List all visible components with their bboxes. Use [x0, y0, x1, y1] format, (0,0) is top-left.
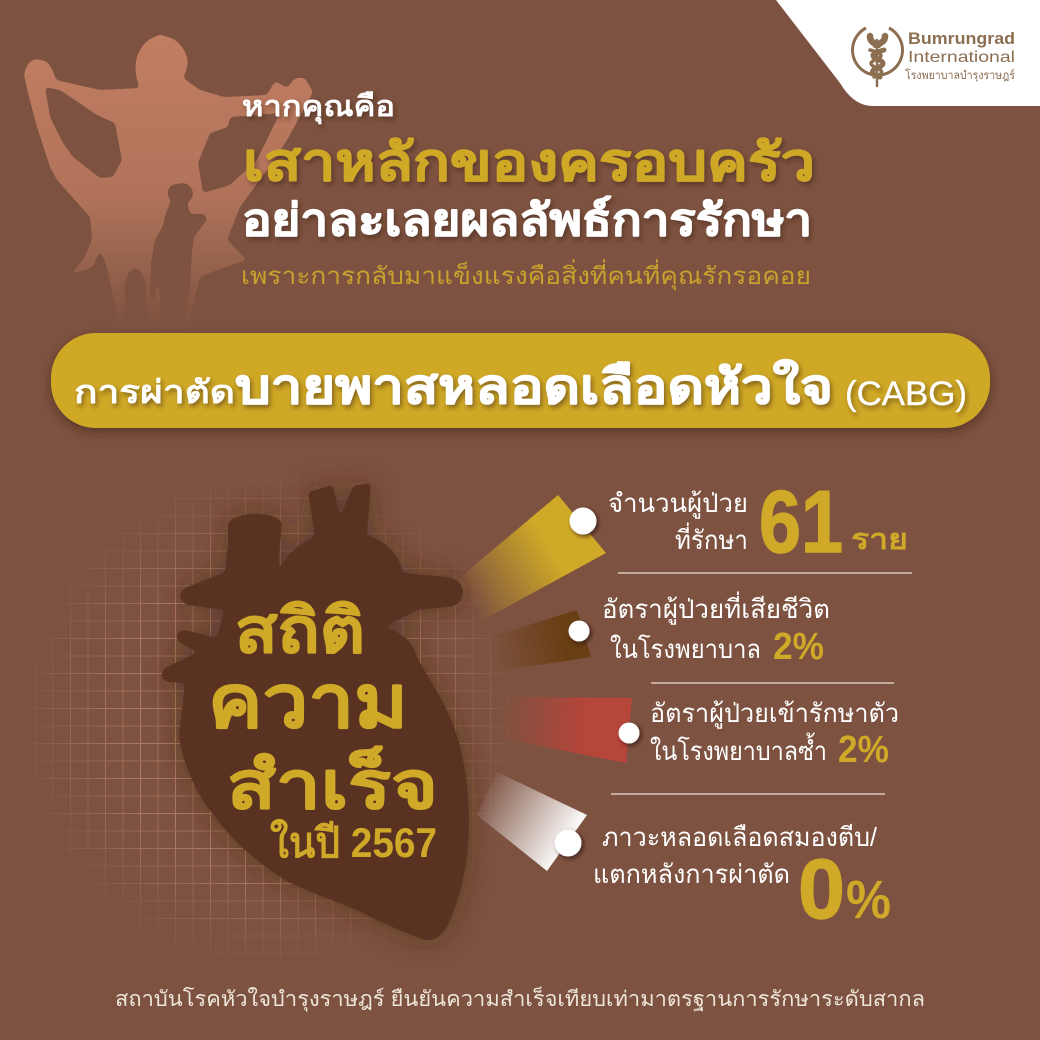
subheading: เพราะการกลับมาแข็งแรงคือสิ่งที่คนที่คุณรักรอคอย [241, 259, 811, 291]
stat: stroke: แตกหลังการผ่าตัด [593, 859, 790, 889]
logo text: International [908, 49, 1015, 66]
stat: readmission: ในโรงพยาบาลซ้ำ [650, 732, 827, 766]
main heading gold: เสาหลักของครอบครัว [243, 134, 815, 192]
ray: brown [480, 610, 591, 674]
dot: gold ray [570, 508, 596, 534]
logo panel [776, 0, 1040, 106]
logo text: โรงพยาบาลบำรุงราษฎร์ [905, 68, 1015, 82]
eyebrow: หากคุณคือ [242, 91, 395, 124]
dot: red ray [618, 722, 640, 744]
stat: readmission: อัตราผู้ป่วยเข้ารักษาตัว [650, 698, 899, 729]
stat: stroke: 0 [798, 842, 845, 936]
stat: stroke: ภาวะหลอดเลือดสมองตีบ/ [602, 822, 878, 852]
dot: white ray [554, 830, 582, 856]
heart title: สถิติ [235, 597, 365, 666]
stat: patients treated: ที่รักษา [675, 522, 748, 555]
stat: patients treated: ราย [851, 524, 908, 556]
stat: readmission: 2% [838, 729, 889, 771]
stat: patients treated [608, 472, 908, 571]
logo text: Bumrungrad [908, 29, 1015, 48]
heart title [208, 597, 438, 866]
footer note: สถาบันโรคหัวใจบำรุงราษฎร์ ยืนยันความสำเร็จเทียบเท่ามาตรฐานการรักษาระดับสากล [115, 985, 925, 1012]
stat: in-hospital mortality: อัตราผู้ป่วยที่เสียชีวิต [602, 591, 830, 625]
dot: brown ray [568, 620, 590, 642]
ray: white [477, 772, 587, 871]
stat: patients treated: 61 [759, 472, 843, 571]
heart title: สำเร็จ [227, 745, 438, 822]
logo text [905, 29, 1015, 82]
stat: stroke [593, 822, 891, 936]
stat: stroke: % [846, 870, 891, 930]
stat: in-hospital mortality: 2% [773, 626, 824, 668]
banner text: (CABG) [845, 375, 967, 413]
grid background [35, 486, 504, 955]
heart title: ความ [208, 660, 408, 743]
stat: patients treated: จำนวนผู้ป่วย [608, 488, 748, 519]
heart [162, 483, 469, 940]
ray: gold [457, 495, 606, 620]
ray: red [500, 697, 632, 763]
stat: in-hospital mortality: ในโรงพยาบาล [610, 634, 761, 664]
banner [51, 333, 990, 428]
banner text: บายพาสหลอดเลือดหัวใจ [235, 358, 833, 414]
title block [241, 91, 815, 291]
main heading white: อย่าละเลยผลลัพธ์การรักษา [242, 195, 812, 245]
logo emblem [852, 28, 902, 86]
silhouette: parent carrying child [24, 33, 313, 330]
heart title: ในปี 2567 [270, 818, 437, 866]
stat: in-hospital mortality [602, 591, 830, 668]
banner text [74, 358, 967, 414]
silhouette: small adult and children [121, 183, 207, 330]
family silhouette [24, 33, 313, 330]
stat: readmission [650, 698, 899, 771]
banner text: การผ่าตัด [74, 374, 235, 410]
